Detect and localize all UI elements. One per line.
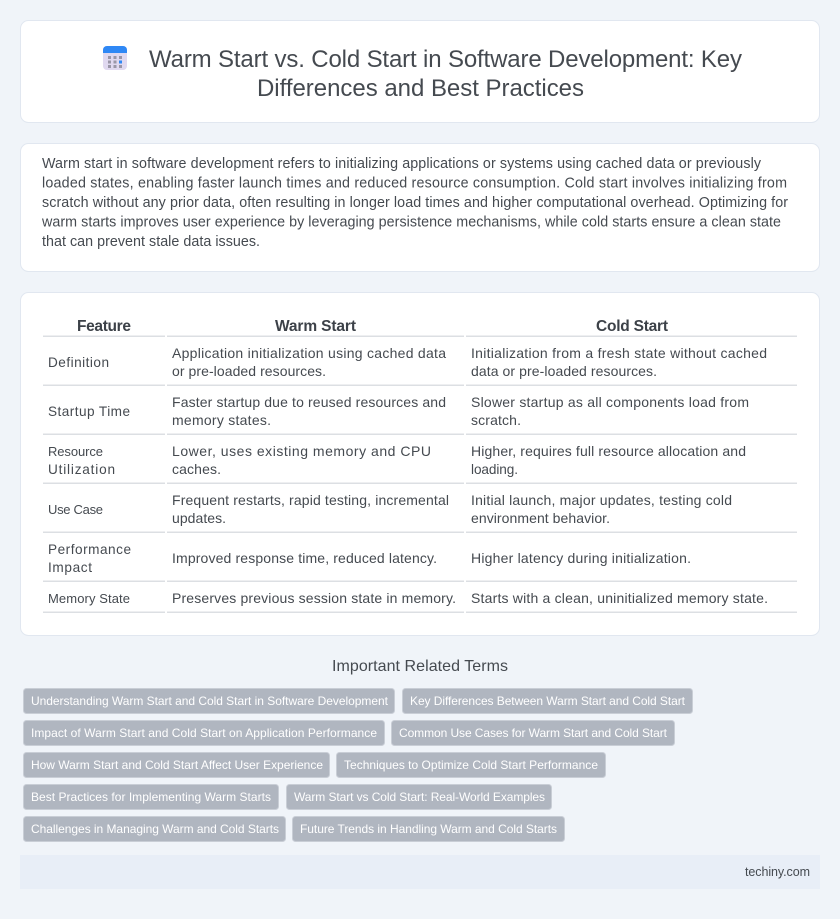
tag — [24, 688, 394, 714]
row: performance impact: Performance — [48, 542, 131, 557]
row: resource utilization: Resource — [48, 444, 103, 459]
table header: Warm Start — [275, 318, 356, 335]
row: startup time: Startup Time — [48, 404, 130, 419]
row: use case: updates. — [172, 510, 226, 526]
row: definition: Definition — [48, 355, 109, 370]
row: resource utilization: Lower, uses existing memory and CPU — [172, 443, 431, 459]
table header: Feature — [77, 318, 131, 335]
related term tags — [24, 688, 692, 842]
row: resource utilization — [43, 443, 797, 484]
tag: Techniques to Optimize Cold Start Performance — [344, 758, 598, 772]
tag — [24, 784, 278, 810]
row: memory state: Memory State — [48, 591, 130, 606]
row: memory state: Starts with a clean, uninitialized memory state. — [471, 590, 768, 606]
row: definition: Initialization from a fresh state without cached — [471, 345, 767, 361]
panel: introduction text: warm starts improves user experience by leveraging persistence mechanisms, while cold starts ensure a clean state — [41, 214, 781, 230]
row: resource utilization: Utilization — [48, 462, 115, 477]
panel: introduction text: loaded states, enabling faster launch times and reduced resource consumption. Cold start involves initializing from — [42, 176, 787, 192]
row: definition — [43, 345, 797, 386]
tag: Warm Start vs Cold Start: Real-World Examples — [294, 790, 545, 804]
tag — [392, 720, 674, 746]
table header — [43, 318, 797, 337]
tag — [24, 816, 286, 842]
row: performance impact — [43, 542, 797, 582]
row: definition: or pre-loaded resources. — [172, 363, 326, 379]
title: Warm Start vs. Cold Start in Software Development: Key — [149, 46, 742, 73]
panel: introduction text: scratch without any prior data, often resulting in longer load times and higher computational overhead. Optimizing for — [42, 195, 788, 211]
table header: Cold Start — [596, 318, 668, 335]
row: performance impact: Improved response time, reduced latency. — [172, 550, 437, 566]
panel: comparison table — [20, 292, 820, 636]
row: use case — [43, 492, 797, 533]
tag — [286, 784, 552, 810]
row: resource utilization: caches. — [172, 461, 221, 477]
row: use case: environment behavior. — [471, 510, 610, 526]
tag — [402, 688, 692, 714]
row: definition: data or pre-loaded resources. — [471, 363, 657, 379]
row: startup time: Faster startup due to reused resources and — [172, 394, 446, 410]
row: definition: Application initialization using cached data — [172, 345, 446, 361]
row: startup time — [43, 394, 797, 435]
row: startup time: Slower startup as all components load from — [471, 394, 749, 410]
panel: introduction text: that can prevent stale data issues. — [42, 234, 260, 250]
row: use case: Initial launch, major updates, testing cold — [471, 492, 732, 508]
footer — [20, 855, 820, 889]
tag: Impact of Warm Start and Cold Start on Application Performance — [31, 726, 377, 740]
tag — [336, 752, 606, 778]
row: startup time: scratch. — [471, 412, 521, 428]
row: startup time: memory states. — [172, 412, 271, 428]
panel: introduction text: Warm start in software development refers to initializing applications or systems using cached data or previously — [42, 156, 762, 172]
tag: Key Differences Between Warm Start and Cold Start — [410, 694, 686, 708]
row: performance impact: Impact — [48, 560, 92, 575]
tag — [24, 752, 330, 778]
row: memory state: Preserves previous session state in memory. — [172, 590, 456, 606]
row: performance impact: Higher latency during initialization. — [471, 550, 691, 566]
tag — [24, 720, 384, 746]
row: resource utilization: loading. — [471, 462, 518, 477]
icon: calendar — [103, 46, 127, 70]
tag: Best Practices for Implementing Warm Starts — [31, 790, 271, 804]
row: use case: Use Case — [48, 502, 103, 517]
title: Differences and Best Practices — [257, 75, 584, 102]
row: use case: Frequent restarts, rapid testing, incremental — [172, 492, 449, 508]
row: resource utilization: Higher, requires full resource allocation and — [471, 443, 746, 459]
panel: introduction text — [20, 144, 820, 272]
tag: Understanding Warm Start and Cold Start in Software Development — [31, 694, 389, 708]
row: memory state — [43, 590, 797, 613]
tag: How Warm Start and Cold Start Affect User Experience — [31, 758, 323, 772]
title — [149, 46, 742, 102]
tag — [292, 816, 564, 842]
heading: related terms: Important Related Terms — [332, 658, 508, 675]
tag: Common Use Cases for Warm Start and Cold Start — [399, 726, 668, 740]
footer: techiny.com — [745, 865, 810, 879]
tag: Future Trends in Handling Warm and Cold Starts — [300, 822, 557, 836]
tag: Challenges in Managing Warm and Cold Starts — [31, 822, 279, 836]
panel: header — [20, 20, 820, 122]
